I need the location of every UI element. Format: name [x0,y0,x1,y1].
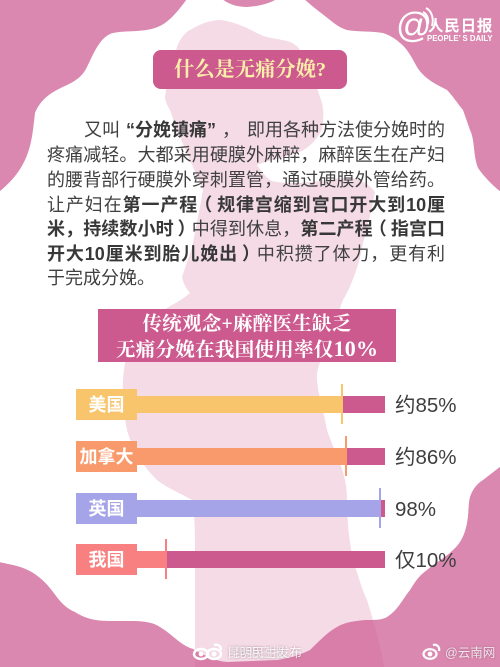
body text: 于完成分娩。 [47,268,155,288]
row: China: 我国 [88,550,124,570]
row: UK [76,488,436,528]
row: UK: 英国 [88,499,124,519]
body text: 开大10厘米到胎儿娩出）中积攒了体力，更有利 [47,244,445,264]
watermark: Weibo Kunming: 昆明民生发布 [227,646,302,660]
row: Canada [76,436,457,476]
subheading banner [98,309,396,362]
row: Canada: 约86% [395,446,457,469]
body text: 米，持续数小时）中得到休息，第二产程（指宫口 [47,219,445,239]
pregnant silhouette [123,20,384,667]
body text: 的腰背部行硬膜外穿刺置管，通过硬膜外管给药。 [47,170,445,190]
title banner [153,50,347,89]
logo: People's Daily: PEOPLE’ S DAILY [427,34,493,43]
row: Canada: 加拿大 [80,447,134,467]
row: USA [76,384,457,424]
watermark: Weibo Kunming: 昆明日报 [234,646,284,660]
body text: 让产妇在第一产程（规律宫缩到宫口开大到10厘 [47,195,445,215]
body text: 疼痛减轻。大都采用硬膜外麻醉，麻醉医生在产妇 [47,145,445,165]
subheading banner: 无痛分娩在我国使用率仅10% [116,336,378,361]
body text [47,120,445,288]
body text: 又叫 “分娩镇痛” ， 即用各种方法使分娩时的 [84,120,445,140]
watermark: Weibo Kunming [192,644,302,660]
row: USA: 美国 [88,395,124,415]
logo: People's Daily: 人民日报 [428,18,493,35]
row: UK: 98% [395,498,436,521]
watermark: Weibo Yunnan: @云南网 [445,646,495,660]
watermark: Weibo Yunnan [422,644,496,660]
logo: People's Daily [396,6,493,44]
row: China [76,539,457,579]
row: USA: 约85% [395,394,457,417]
subheading banner: 传统观念+麻醉医生缺乏 [142,314,352,335]
title banner: 什么是无痛分娩? [174,59,326,81]
bar chart [76,384,457,579]
row: China: 仅10% [395,549,457,572]
logo: People's Daily: @ [396,6,432,44]
